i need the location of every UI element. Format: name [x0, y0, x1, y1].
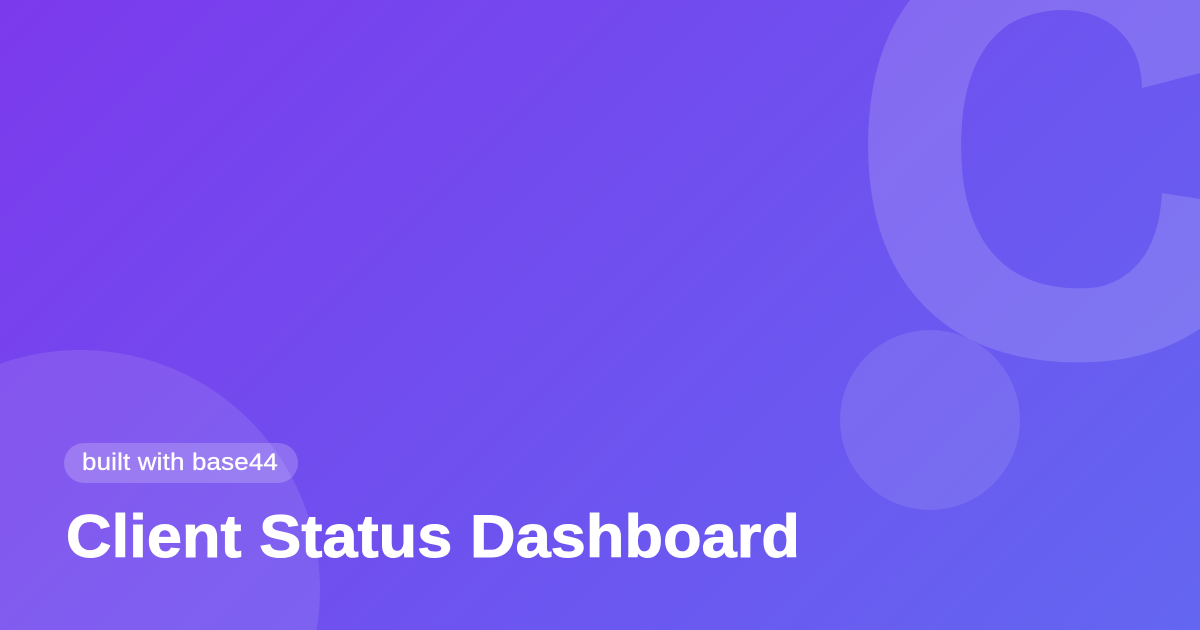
- decorative circle: right: [840, 330, 1020, 510]
- badge: built with base44: [64, 443, 298, 483]
- title: Client Status Dashboard: [66, 503, 800, 570]
- badge: built with base44: built with base44: [82, 449, 278, 476]
- decorative circle: bottom left: [0, 350, 320, 630]
